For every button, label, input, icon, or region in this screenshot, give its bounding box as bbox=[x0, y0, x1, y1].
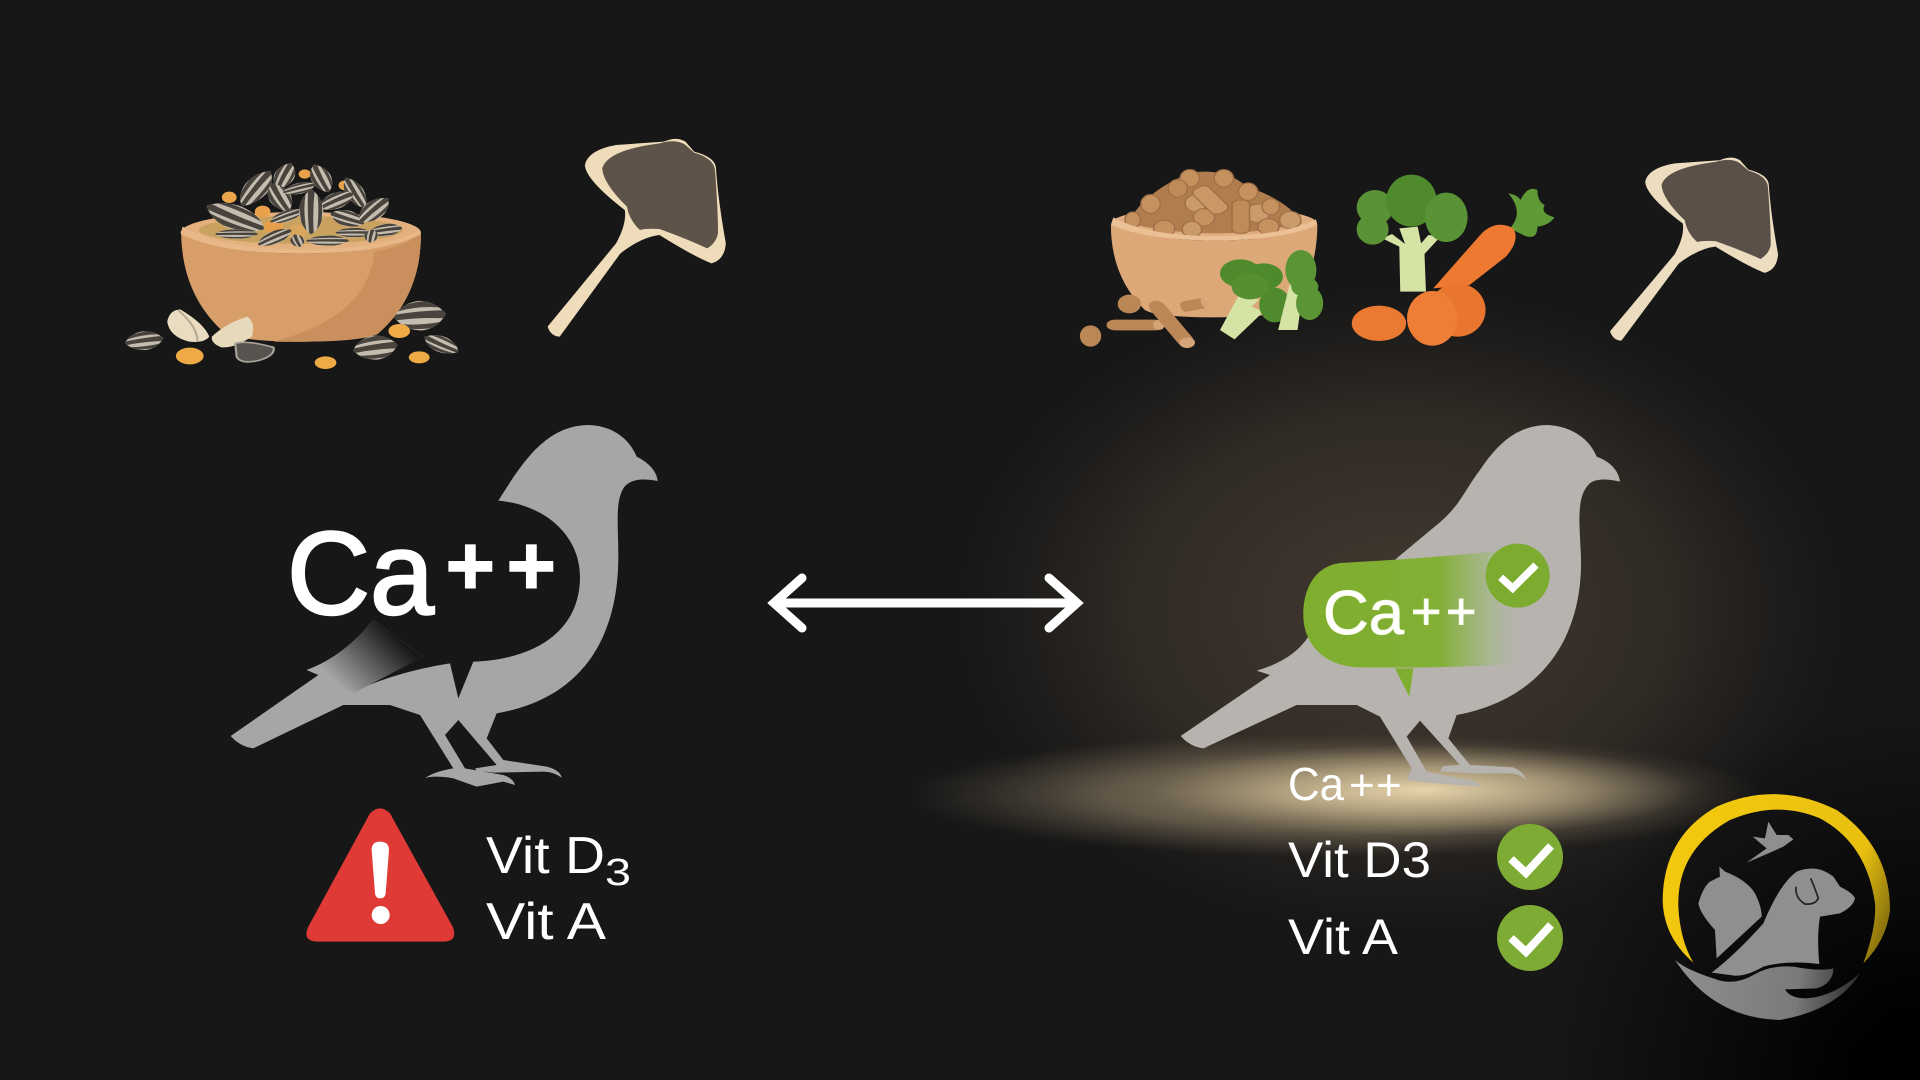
label: large Ca++: + bbox=[508, 521, 555, 610]
label: large Ca++: + bbox=[447, 521, 494, 610]
small broccoli bbox=[1220, 250, 1323, 339]
text: missing vitamins bbox=[486, 827, 631, 951]
wing shadow fade bbox=[307, 620, 423, 693]
label: large Ca++ bbox=[287, 508, 555, 640]
scattered seeds bbox=[123, 299, 463, 369]
check Vit A bbox=[1497, 905, 1563, 971]
carrot bbox=[1352, 189, 1554, 346]
icon: left spatula bbox=[548, 139, 726, 337]
icon: right spatula bbox=[1610, 158, 1778, 341]
hand bbox=[1675, 960, 1860, 1020]
green Ca++ bubble bbox=[1303, 552, 1523, 667]
dog bbox=[1712, 868, 1855, 976]
pellet heap bbox=[1111, 170, 1317, 240]
yellow ring bbox=[1663, 794, 1890, 963]
floor glow bright core bbox=[1155, 744, 1695, 836]
left bird with calcium deficit bbox=[231, 425, 658, 787]
bird silhouette bbox=[231, 425, 658, 787]
icon: bowl of sunflower seeds bbox=[123, 160, 463, 369]
label: bubble Ca++: + bbox=[1446, 583, 1476, 641]
ambient glow behind right bird bbox=[960, 290, 1840, 930]
label: bubble Ca++: Ca bbox=[1323, 579, 1405, 648]
cat bbox=[1698, 867, 1762, 958]
bowl body bbox=[181, 234, 421, 342]
bubble pointer bbox=[1395, 668, 1413, 697]
right nutrient list: + bbox=[1376, 761, 1402, 810]
large broccoli bbox=[1357, 175, 1468, 292]
right bird healthy bbox=[1181, 425, 1620, 787]
label: bubble Ca++ bbox=[1323, 579, 1476, 648]
bowl back rim bbox=[181, 212, 421, 253]
text: missing vitamins: Vit A bbox=[486, 893, 606, 951]
Vit A row: Vit A bbox=[1288, 909, 1399, 965]
right nutrient list: + bbox=[1349, 761, 1375, 810]
check Vit D3 bbox=[1497, 824, 1563, 890]
floor glow under right bird bbox=[910, 733, 1770, 857]
label: bubble Ca++: + bbox=[1411, 583, 1441, 641]
bowl body bbox=[1111, 225, 1317, 317]
Ca++ row: Ca bbox=[1288, 758, 1344, 810]
double-headed arrow bbox=[774, 578, 1077, 628]
bottom-right corner shade bbox=[1540, 700, 1920, 1080]
Vit D3 row: Vit D3 bbox=[1288, 832, 1431, 888]
logo bbox=[1663, 794, 1890, 1020]
check badge bbox=[1486, 544, 1550, 608]
small bird bbox=[1747, 822, 1793, 863]
text: missing vitamins: 3 bbox=[605, 852, 631, 894]
text: missing vitamins: Vit D bbox=[486, 827, 605, 885]
bird silhouette bbox=[1181, 425, 1620, 787]
warning triangle bbox=[306, 808, 454, 942]
label: large Ca++: Ca bbox=[287, 508, 434, 640]
right nutrient list bbox=[1288, 758, 1563, 971]
icon: bowl of pellets and broccoli bbox=[1080, 170, 1554, 350]
seed heap bbox=[199, 160, 404, 250]
scattered pellets bbox=[1080, 295, 1208, 350]
